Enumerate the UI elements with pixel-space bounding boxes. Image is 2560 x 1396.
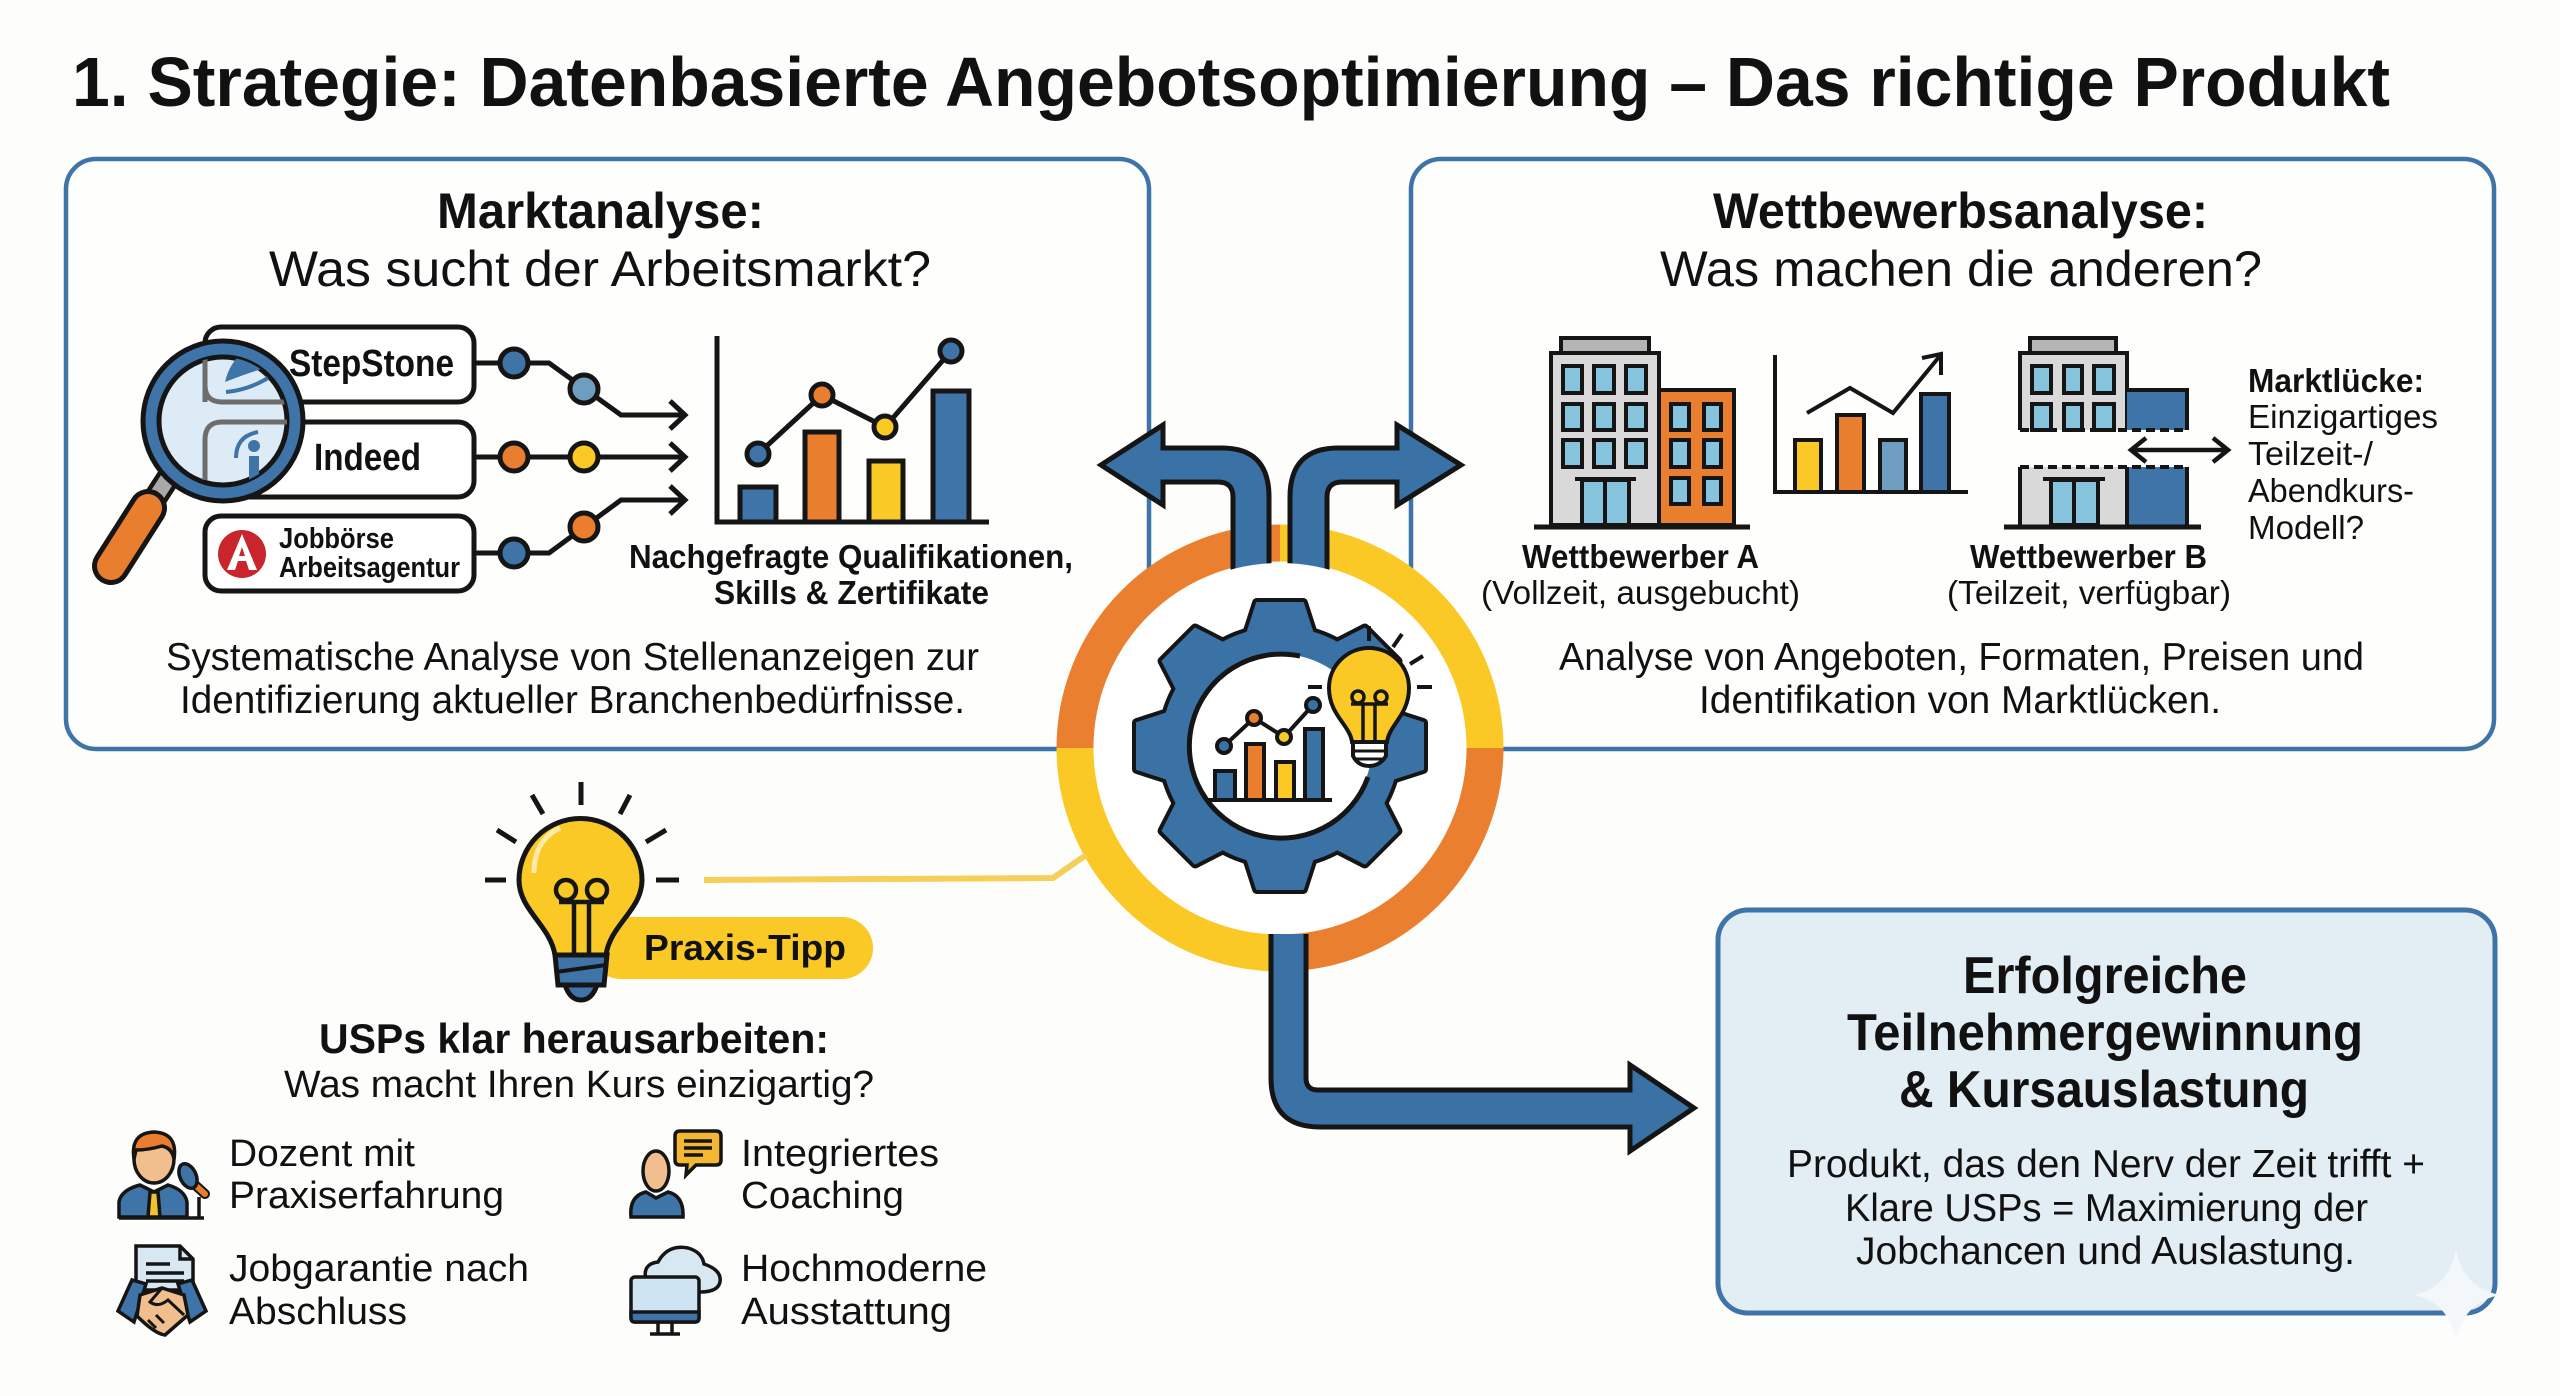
icon: building competitor B with gap [2004,338,2201,527]
heading: result: Erfolgreiche [1963,947,2247,1005]
usp: Integriertes Coaching [631,1131,939,1217]
text: Dozent mit Praxiserfahrung [229,1133,504,1217]
text: result description: Produkt, das den Nerv der Zeit trifft + [1787,1143,2425,1186]
text: result description: Klare USPs = Maximierung der [1845,1187,2368,1230]
heading: result: & Kursauslastung [1899,1061,2309,1119]
callout: Marktlücke: Einzigartiges [2248,398,2438,435]
usp: Hochmoderne Ausstattung [631,1247,987,1334]
icon: hub light bulb [1308,626,1432,766]
heading: Marktanalyse: Marktanalyse: [437,183,764,239]
connector: StepStone to chart [474,349,685,429]
chart: demanded qualifications [717,336,989,522]
heading: Wettbewerbsanalyse: Was machen die anderen? [1660,241,2262,297]
text: Jobgarantie nach Abschluss: Jobgarantie nach [229,1248,529,1290]
text: Jobgarantie nach Abschluss [229,1248,529,1333]
badge: Praxis-Tipp [590,917,873,979]
text: Hochmoderne Ausstattung: Ausstattung [741,1291,952,1333]
panel: Marktanalyse [66,159,1149,749]
icon: coach with speech bubble [631,1131,721,1217]
connector: Indeed to chart [474,443,685,471]
text: result description [1787,1143,2425,1273]
job board: Jobbörse Arbeitsagentur: Arbeitsagentur [279,552,460,584]
job board: Jobbörse Arbeitsagentur [205,516,474,591]
central hub: ring, gear and arrows [1075,425,1694,1151]
icon: magnifying glass [111,341,303,566]
heading: Marktanalyse [269,183,931,297]
text: Hochmoderne Ausstattung: Hochmoderne [741,1248,987,1290]
arrow: to Wettbewerbsanalyse [1290,425,1461,580]
icon: contract and handshake [118,1246,206,1335]
job board: Indeed [205,422,474,497]
job board: Indeed: Indeed [314,437,421,479]
callout: Marktlücke: Marktlücke: [2248,362,2424,399]
job board: StepStone [205,327,474,402]
description: Marktanalyse [166,636,979,722]
description: Marktanalyse: Systematische Analyse von Stellenanzeigen zur [166,636,979,679]
heading: USPs [284,1015,874,1106]
chart caption: Skills & Zertifikate [714,574,989,611]
heading: Wettbewerbsanalyse: Wettbewerbsanalyse: [1713,183,2208,239]
arrow: to Marktanalyse [1101,425,1269,580]
label: Wettbewerber B [1947,538,2231,611]
heading: USPs: USPs klar herausarbeiten: [319,1015,829,1062]
label: Wettbewerber B: Wettbewerber B [1970,538,2207,575]
label: Wettbewerber A [1481,538,1800,611]
heading: USPs: Was macht Ihren Kurs einzigartig? [284,1064,874,1106]
label: Wettbewerber A: (Vollzeit, ausgebucht) [1481,574,1800,611]
job board: StepStone: StepStone [289,343,454,385]
chart caption [629,538,1073,611]
label: Wettbewerber A: Wettbewerber A [1522,538,1759,575]
description: Wettbewerbsanalyse [1559,636,2364,722]
panel: Wettbewerbsanalyse [1411,159,2494,749]
label: Wettbewerber B: (Teilzeit, verfügbar) [1947,574,2231,611]
callout: Marktlücke: Teilzeit-/ [2248,435,2374,472]
heading: Marktanalyse: Was sucht der Arbeitsmarkt? [269,241,931,297]
heading: result: Teilnehmergewinnung [1847,1004,2363,1062]
heading: Wettbewerbsanalyse [1660,183,2262,297]
description: Marktanalyse: Identifizierung aktueller Branchenbedürfnisse. [180,679,965,722]
badge: Praxis-Tipp: Praxis-Tipp [644,927,846,968]
ring [1075,543,1485,953]
title: 1. Strategie: Datenbasierte Angebotsoptimierung – Das richtige Produkt [72,43,2390,121]
text: Hochmoderne Ausstattung [741,1248,987,1333]
description: Wettbewerbsanalyse: Identifikation von Marktlücken. [1699,679,2221,722]
chart caption: Nachgefragte Qualifikationen, [629,538,1073,575]
callout: Marktlücke [2248,362,2438,546]
icon: sparkle watermark [2414,1250,2500,1340]
callout: Marktlücke: Abendkurs- [2248,472,2414,509]
icon: hub mini chart [1208,698,1332,800]
callout: Marktlücke: Modell? [2248,509,2364,546]
usp: Jobgarantie nach Abschluss [118,1246,529,1335]
text: Integriertes Coaching: Coaching [741,1175,904,1217]
text: Integriertes Coaching: Integriertes [741,1133,939,1175]
chart: competition trend [1775,354,1968,492]
description: Wettbewerbsanalyse: Analyse von Angeboten, Formaten, Preisen und [1559,636,2364,679]
text: Jobgarantie nach Abschluss: Abschluss [229,1291,407,1333]
icon: monitor and cloud [631,1247,720,1334]
connector line: hub to tip [704,855,1086,880]
icon: double arrow [2131,438,2228,462]
job board: Jobbörse Arbeitsagentur: Jobbörse [279,523,394,555]
section: Praxis-Tipp [118,782,987,1335]
text: Integriertes Coaching [741,1133,939,1217]
text: Dozent mit Praxiserfahrung: Praxiserfahrung [229,1175,504,1217]
text: result description: Jobchancen und Auslastung. [1856,1230,2355,1273]
arrow: to result [1271,934,1694,1151]
connector: Jobbörse to chart [474,486,685,567]
panel: result [1718,910,2500,1340]
icon: large light bulb [485,782,679,1000]
icon: lecturer [119,1132,205,1218]
icon: building competitor A [1534,338,1750,527]
heading: result [1847,947,2363,1119]
icon: gear [1137,603,1423,889]
text: Dozent mit Praxiserfahrung: Dozent mit [229,1133,415,1175]
usp: Dozent mit Praxiserfahrung [119,1132,504,1218]
